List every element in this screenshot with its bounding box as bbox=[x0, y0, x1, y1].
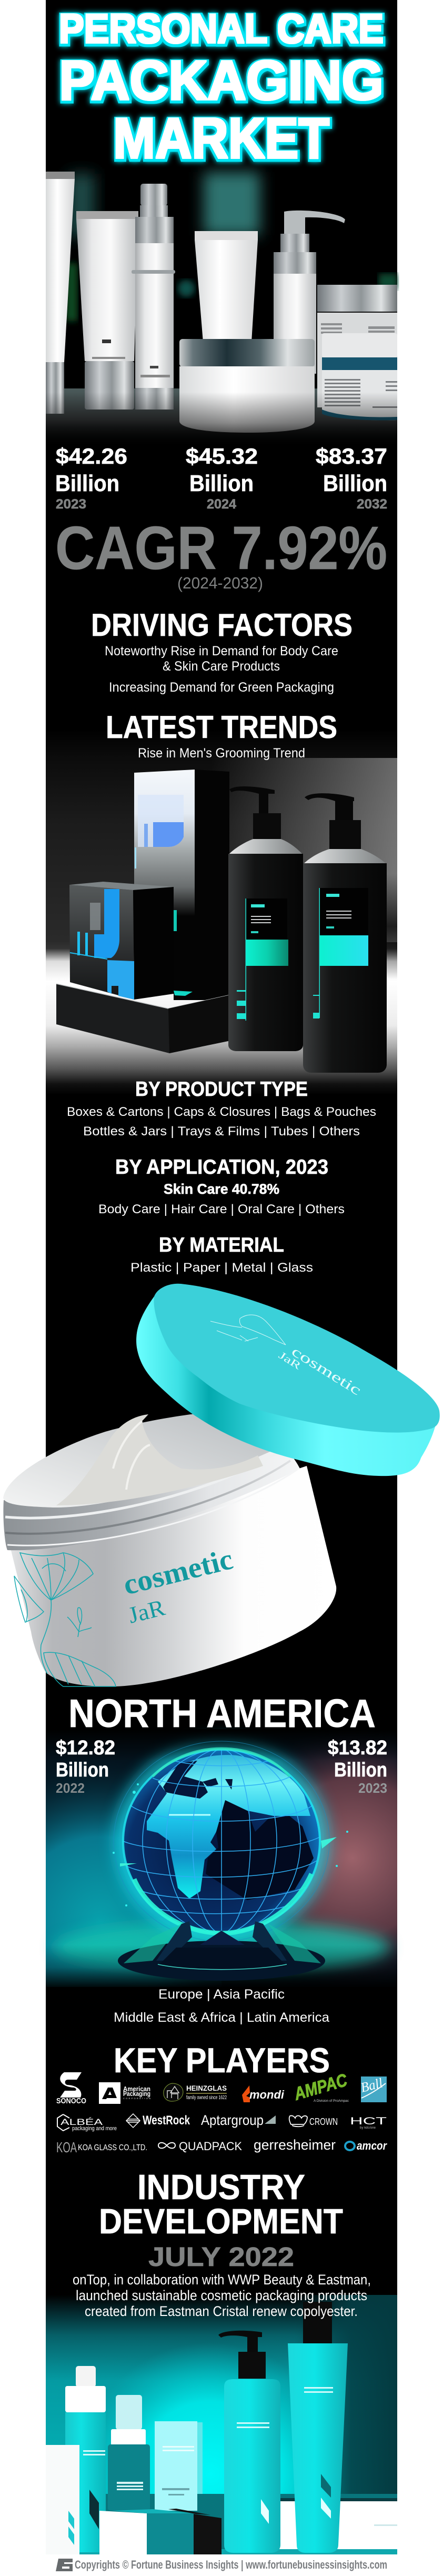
jar label text: JaR bbox=[126, 1594, 168, 1629]
logo: Quadpack: QUADPACK bbox=[179, 2140, 242, 2153]
logo: WestRock bbox=[126, 2113, 190, 2128]
by product type: Bottles & Jars | Trays & Films | Tubes | Others bbox=[83, 1124, 360, 1139]
north america value 2022: 2022 bbox=[56, 1780, 85, 1796]
logo: Heinz Glas: HEINZGLAS bbox=[186, 2084, 227, 2092]
latest trends: LATEST TRENDS bbox=[106, 710, 337, 745]
jar lid bbox=[136, 1284, 440, 1476]
logo: Albea: ALBÉA bbox=[61, 2117, 103, 2127]
jar label text bbox=[120, 1543, 236, 1629]
market value 2023 bbox=[55, 444, 127, 512]
small blue box bbox=[69, 882, 174, 1000]
by product type bbox=[67, 1078, 376, 1139]
lid text: JaR bbox=[276, 1350, 304, 1372]
title: PACKAGING bbox=[59, 49, 384, 112]
market value 2032: 2032 bbox=[357, 497, 387, 512]
dark teal spray bottle bbox=[108, 2395, 150, 2511]
by application: BY APPLICATION, 2023 bbox=[115, 1156, 328, 1179]
by application: Skin Care 40.78% bbox=[164, 1181, 279, 1197]
page background panel bbox=[46, 0, 397, 2554]
logo: American Packaging: CORPORATION bbox=[123, 2097, 150, 2100]
logo: HCT: HCT bbox=[350, 2116, 387, 2127]
industry development product photo bbox=[46, 2295, 397, 2554]
logo: Mondi bbox=[242, 2085, 285, 2102]
driving factors: & Skin Care Products bbox=[163, 659, 280, 674]
white box left bbox=[46, 2445, 79, 2554]
by application bbox=[98, 1156, 345, 1216]
logo: WestRock: WestRock bbox=[143, 2113, 190, 2128]
jar interior bbox=[3, 1414, 284, 1507]
logo: HCT: by kdc/one bbox=[360, 2126, 376, 2130]
slim silver pump bottle bbox=[132, 184, 175, 410]
right pump bottle bbox=[274, 211, 345, 374]
cream swirl bbox=[56, 1414, 263, 1505]
logo: Heinz Glas: family owned since 1622 bbox=[186, 2095, 227, 2101]
logo: HCT bbox=[350, 2116, 387, 2130]
teal tube bbox=[288, 2302, 348, 2553]
Europe bbox=[163, 1761, 233, 1799]
logo: Albea bbox=[57, 2114, 117, 2132]
development description: created from Eastman Cristal renew copolyester. bbox=[85, 2303, 358, 2319]
lid text bbox=[276, 1343, 364, 1399]
lid text: cosmetic bbox=[289, 1343, 364, 1399]
development description bbox=[73, 2272, 371, 2319]
by material: BY MATERIAL bbox=[159, 1234, 284, 1256]
other regions: Middle East & Africa | Latin America bbox=[114, 2010, 329, 2025]
logo: Mondi: mondi bbox=[249, 2088, 285, 2101]
logo: Ball bbox=[359, 2075, 387, 2102]
tall box bbox=[134, 770, 229, 1000]
north america value 2023: Billion bbox=[334, 1759, 387, 1781]
tube three bbox=[195, 231, 258, 342]
development description: onTop, in collaboration with WWP Beauty & Eastman, bbox=[73, 2272, 371, 2288]
north america value 2023: $13.82 bbox=[328, 1737, 387, 1759]
date: JULY 2022 bbox=[148, 2242, 294, 2272]
logo: American Packaging: American bbox=[123, 2085, 150, 2093]
by product type: BY PRODUCT TYPE bbox=[135, 1078, 308, 1101]
driving factors: Increasing Demand for Green Packaging bbox=[109, 680, 334, 695]
market value 2024 bbox=[186, 444, 258, 512]
left tube bbox=[46, 172, 75, 414]
CAGR: CAGR 7.92% bbox=[55, 514, 387, 582]
logo: Koa Glass: KOA bbox=[56, 2139, 77, 2155]
market value 2023: Billion bbox=[55, 471, 119, 496]
footer logo icon bbox=[56, 2559, 73, 2571]
logo: Heinz Glas bbox=[164, 2083, 227, 2101]
title bbox=[59, 5, 384, 171]
north america value 2023 bbox=[328, 1737, 387, 1796]
driving factors: DRIVING FACTORS bbox=[91, 607, 353, 643]
hero image: cosmetic containers bbox=[46, 172, 397, 447]
by material: Plastic | Paper | Metal | Glass bbox=[130, 1261, 313, 1275]
north america value 2022: $12.82 bbox=[56, 1737, 115, 1759]
logo: Sonoco: SONOCO bbox=[56, 2096, 86, 2105]
other regions bbox=[114, 1987, 329, 2025]
market value 2032 bbox=[316, 444, 387, 512]
tube two bbox=[76, 211, 138, 410]
logo: Aptargroup: Aptargroup bbox=[201, 2112, 264, 2128]
teal bottle with white cap bbox=[65, 2366, 106, 2552]
logo: Ball: Ball bbox=[359, 2075, 384, 2095]
logo: Ampac: A Division of ProAmpac bbox=[314, 2099, 349, 2103]
market value 2024: Billion bbox=[189, 471, 254, 496]
by application: Body Care | Hair Care | Oral Care | Others bbox=[98, 1202, 345, 1216]
lid line art bbox=[210, 1315, 286, 1345]
light cyan box bbox=[155, 2421, 203, 2511]
title: MARKET bbox=[113, 106, 329, 171]
logo: Amcor: amcor bbox=[357, 2139, 387, 2152]
latest trends bbox=[106, 710, 337, 761]
market value 2024: 2024 bbox=[207, 497, 236, 512]
by material bbox=[130, 1234, 313, 1275]
other regions: Europe | Asia Pacific bbox=[158, 1987, 285, 2002]
hero bottom fade bbox=[46, 392, 397, 447]
trends product photo bbox=[46, 729, 397, 1095]
development description: launched sustainable cosmetic packaging products bbox=[76, 2288, 367, 2303]
market value 2024: $45.32 bbox=[186, 444, 258, 468]
flower line art bbox=[14, 1553, 116, 1686]
logo: Sonoco bbox=[56, 2072, 86, 2105]
base block bbox=[56, 984, 230, 1053]
north america globe visual bbox=[46, 1729, 397, 1990]
industry development heading bbox=[99, 2168, 343, 2241]
logo: Crown bbox=[289, 2115, 338, 2127]
market value 2032: $83.37 bbox=[316, 444, 387, 468]
latest trends: Rise in Men's Grooming Trend bbox=[138, 746, 305, 761]
logo: Koa Glass bbox=[56, 2139, 147, 2155]
market value 2032: Billion bbox=[323, 471, 387, 496]
driving factors bbox=[91, 607, 353, 695]
small box front bbox=[99, 2509, 222, 2554]
footer bbox=[46, 2554, 397, 2576]
globe pedestal bbox=[118, 1921, 325, 1981]
background glows bbox=[66, 172, 397, 321]
title: PERSONAL CARE bbox=[59, 5, 384, 52]
by product type: Boxes & Cartons | Caps & Closures | Bags & Pouches bbox=[67, 1105, 376, 1119]
key players heading: KEY PLAYERS bbox=[114, 2041, 330, 2080]
globe rim glow bbox=[123, 1750, 320, 1933]
north america value 2022: Billion bbox=[56, 1759, 109, 1781]
back right jar bbox=[317, 285, 397, 407]
logo: Gerresheimer: gerresheimer bbox=[254, 2137, 336, 2153]
teal pump bottle bbox=[218, 2331, 280, 2553]
cosmetic jar illustration bbox=[3, 1284, 440, 1686]
north america value 2022 bbox=[56, 1737, 115, 1796]
industry development heading: DEVELOPMENT bbox=[99, 2202, 343, 2241]
logo: Albea: packaging and more bbox=[72, 2125, 117, 2132]
logo: Crown: CROWN bbox=[309, 2116, 338, 2127]
bright ocean and Africa bbox=[147, 1755, 310, 1899]
black pump bottle right bbox=[303, 793, 387, 1073]
white box right bbox=[279, 2498, 397, 2549]
floor bbox=[46, 388, 397, 447]
CAGR: (2024-2032) bbox=[177, 574, 263, 592]
north america value 2023: 2023 bbox=[358, 1780, 387, 1796]
black pump bottle left bbox=[228, 786, 303, 1051]
jar body bbox=[6, 1466, 336, 1686]
big front jar bbox=[179, 339, 315, 433]
logo: American Packaging bbox=[99, 2082, 150, 2104]
logo: Amcor bbox=[345, 2139, 387, 2152]
logo: American Packaging: Packaging bbox=[123, 2090, 150, 2098]
driving factors: Noteworthy Rise in Demand for Body Care bbox=[105, 644, 338, 658]
logo: Ampac: AMPAC bbox=[291, 2070, 350, 2104]
Asia shadow bbox=[206, 1800, 314, 1900]
globe grid lines bbox=[123, 1749, 320, 1933]
industry development heading: INDUSTRY bbox=[137, 2168, 305, 2207]
north america heading: NORTH AMERICA bbox=[68, 1691, 376, 1735]
globe bbox=[113, 1741, 348, 1941]
logo: Koa Glass: KOA GLASS CO.,LTD. bbox=[78, 2143, 147, 2152]
market value 2023: 2023 bbox=[56, 497, 86, 512]
jar neck threads bbox=[3, 1440, 300, 1550]
market value 2023: $42.26 bbox=[56, 444, 127, 468]
jar label text: cosmetic bbox=[120, 1543, 236, 1602]
front right jar bbox=[322, 333, 397, 420]
